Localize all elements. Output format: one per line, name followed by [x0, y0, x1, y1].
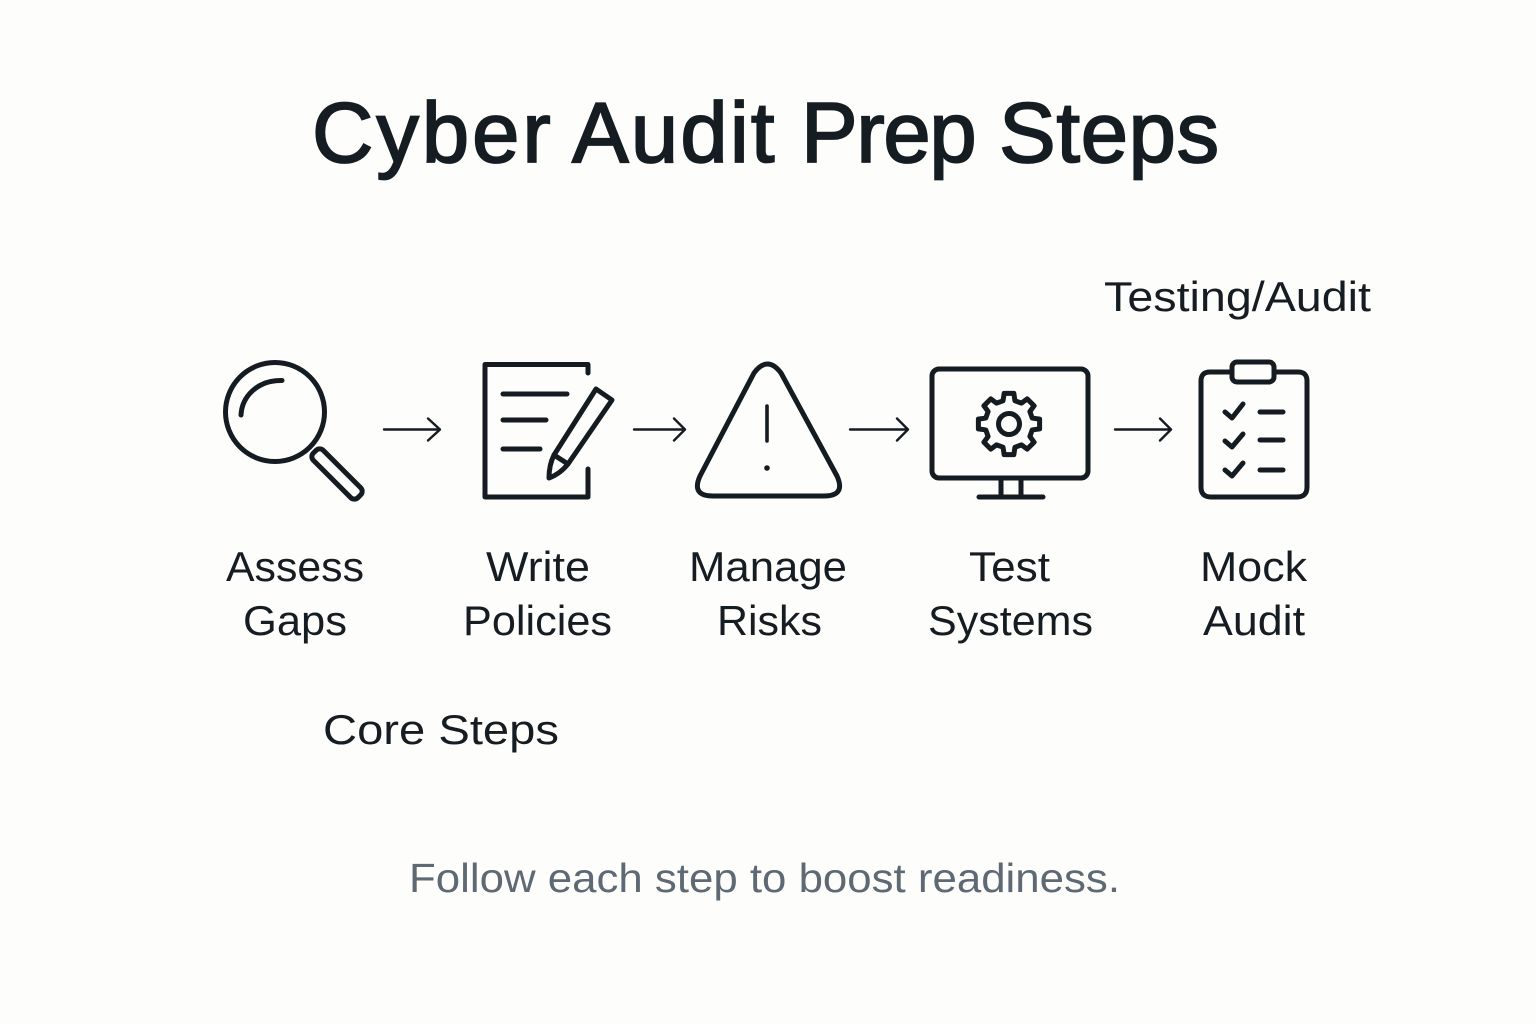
icon: document with pencil	[485, 364, 612, 497]
title: Prep	[801, 86, 975, 181]
step label: Write Policies: Policies	[463, 597, 612, 644]
arrow: assess to write	[384, 418, 440, 440]
arrow: manage to test	[850, 418, 908, 440]
step label: Write Policies: Write	[486, 543, 590, 590]
group label: Testing/Audit: Testing/Audit	[1104, 273, 1371, 320]
arrow: test to mock audit	[1115, 418, 1171, 440]
icon: warning triangle	[697, 364, 840, 496]
icon: magnifying glass	[226, 362, 364, 501]
step label: Mock Audit	[1200, 543, 1308, 644]
step label: Manage Risks	[689, 543, 847, 644]
step label: Manage Risks: Risks	[717, 597, 822, 644]
step label: Test Systems: Test	[969, 543, 1050, 590]
step label: Mock Audit: Audit	[1203, 597, 1305, 644]
icon: clipboard checklist	[1201, 362, 1307, 497]
step label: Write Policies	[463, 543, 612, 644]
icon: monitor with gear	[932, 369, 1088, 497]
group label: Core Steps: Core Steps	[323, 706, 559, 753]
arrow: write to manage	[634, 418, 685, 440]
title: Cyber	[312, 86, 554, 181]
step label: Assess Gaps: Assess	[226, 543, 364, 590]
step label: Mock Audit: Mock	[1200, 543, 1308, 590]
step label: Test Systems: Systems	[928, 597, 1093, 644]
title: Steps	[999, 86, 1220, 181]
step label: Assess Gaps	[226, 543, 364, 644]
footer caption: Follow each step to boost readiness.	[409, 855, 1120, 901]
step label: Test Systems	[928, 543, 1093, 644]
step label: Assess Gaps: Gaps	[243, 597, 347, 644]
title: Audit	[572, 86, 777, 181]
step label: Manage Risks: Manage	[689, 543, 847, 590]
